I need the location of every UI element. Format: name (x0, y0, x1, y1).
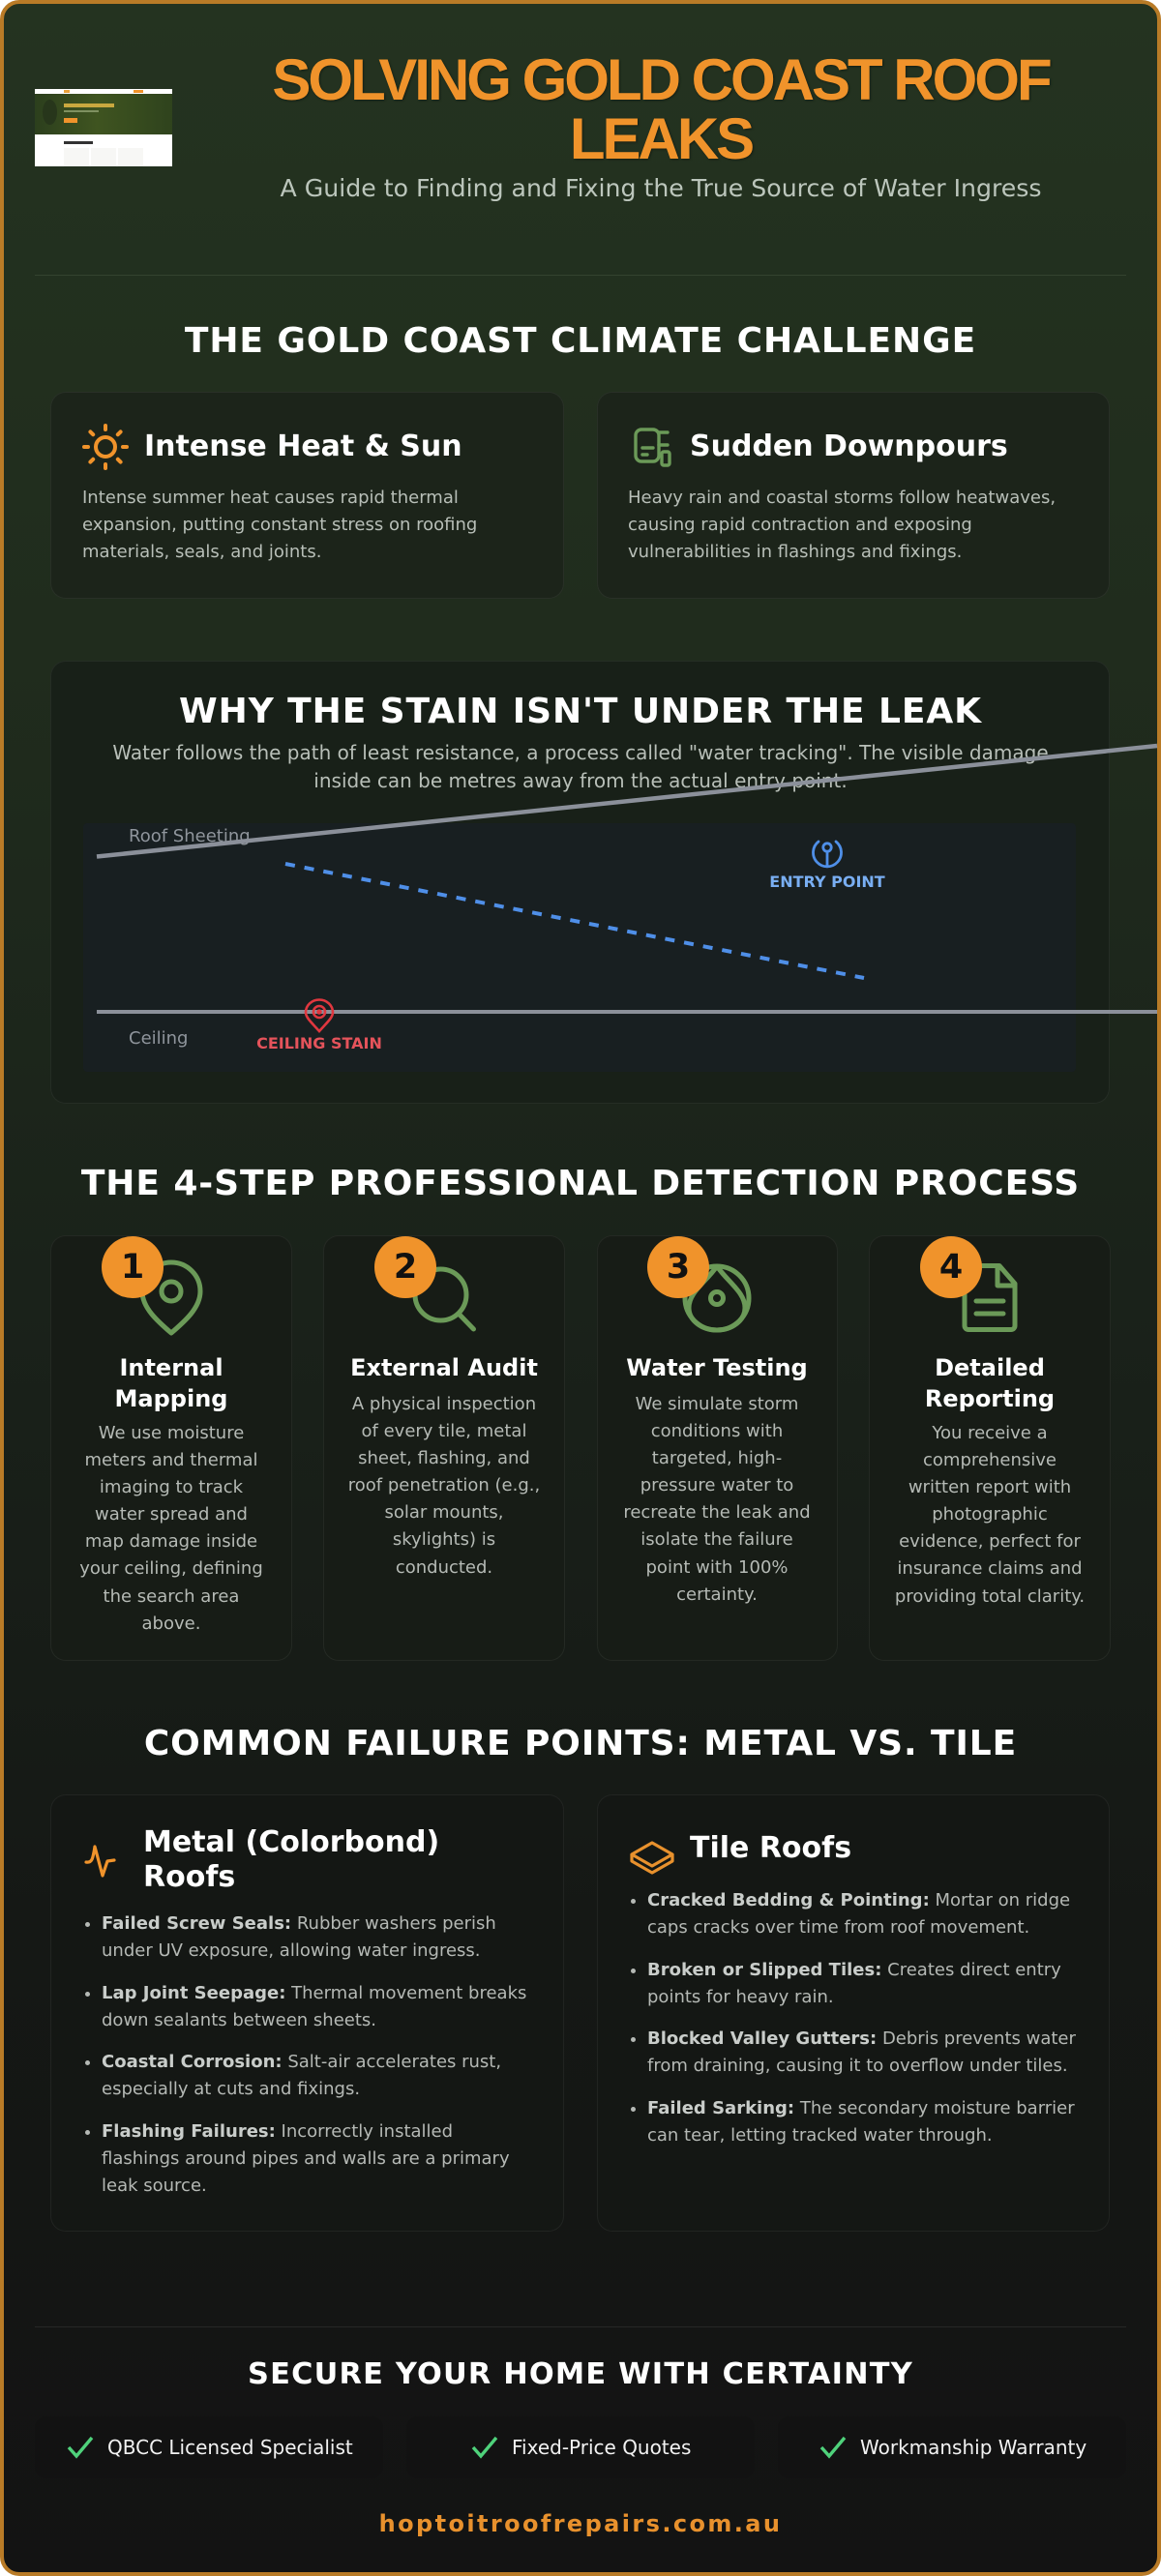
item: Flashing Failures: Incorrectly installed (102, 2121, 453, 2142)
panel: sudden downpours (597, 392, 1110, 599)
title: SOLVING GOLD COAST ROOF (272, 47, 1050, 112)
item: points for heavy rain. (647, 1987, 834, 2007)
item: flashings around pipes and walls are a primary (102, 2148, 510, 2169)
item (647, 2095, 1075, 2149)
step description: providing total clarity. (895, 1586, 1085, 1607)
badge: 3: 3 (667, 1248, 690, 1287)
item: Cracked Bedding & Pointing: Mortar on ridge (647, 1890, 1070, 1910)
step description: conditions with (651, 1421, 783, 1441)
panel: step 1 (50, 1235, 292, 1661)
item: Lap Joint Seepage: Thermal movement breaks (102, 1983, 526, 2003)
heading: metal roofs: Metal (Colorbond) (143, 1825, 439, 1859)
step title: Detailed (935, 1354, 1045, 1381)
item: Blocked Valley Gutters: Debris prevents water (647, 2028, 1076, 2049)
diagram background (83, 823, 1076, 1072)
panel: water tracking (50, 661, 1110, 1104)
step description: comprehensive (923, 1450, 1057, 1470)
badge: 2 (374, 1236, 436, 1298)
text: water tracking: inside can be metres away from the actual entry point. (313, 769, 848, 792)
step description: We simulate storm (636, 1394, 798, 1414)
icon: check (820, 2436, 846, 2459)
step title: Internal (119, 1354, 223, 1381)
text: intense heat: expansion, putting constant stress on roofing (82, 515, 477, 535)
heading: sudden downpours: Sudden Downpours (690, 429, 1008, 463)
text: intense heat: Intense summer heat causes rapid thermal (82, 488, 459, 508)
step description (895, 1423, 1085, 1607)
panel: metal roofs (50, 1794, 564, 2232)
icon: check (472, 2436, 497, 2459)
section heading: detection process: THE 4-STEP PROFESSIONAL DETECTION PROCESS (81, 1164, 1080, 1203)
item: Failed Screw Seals: Rubber washers perish (102, 1913, 496, 1934)
title (272, 47, 1051, 171)
icon: rain (634, 428, 671, 467)
item (647, 2026, 1076, 2080)
step description: above. (142, 1614, 200, 1634)
label: roof sheeting: Roof Sheeting (129, 826, 251, 846)
step description: You receive a (932, 1423, 1048, 1443)
heading: metal roofs (143, 1825, 439, 1894)
text: water tracking: Water follows the path of least resistance, a process called "water tracking". The visible damage (112, 741, 1049, 764)
step description: evidence, perfect for (899, 1531, 1081, 1552)
logo thumbnail (35, 89, 172, 166)
step description: imaging to track (100, 1477, 243, 1497)
badge: 1 (102, 1236, 164, 1298)
label: ceiling stain: CEILING STAIN (256, 1034, 382, 1052)
text: sudden downpours (628, 488, 1056, 562)
heading: tile roofs: Tile Roofs (690, 1831, 851, 1865)
trust badge: warranty (778, 2416, 1126, 2478)
step description: point with 100% (646, 1557, 788, 1578)
step title: Mapping (115, 1385, 227, 1412)
badge: 1: 1 (121, 1248, 144, 1287)
step description: certainty. (676, 1584, 758, 1605)
step description: insurance claims and (897, 1558, 1083, 1579)
text: water tracking (112, 741, 1049, 792)
step description: isolate the failure (640, 1529, 793, 1550)
text: intense heat: materials, seals, and joints. (82, 542, 321, 562)
heading: metal roofs: Roofs (143, 1860, 235, 1894)
step description (623, 1394, 811, 1605)
step description: meters and thermal (84, 1450, 257, 1470)
text: sudden downpours: Heavy rain and coastal storms follow heatwaves, (628, 488, 1056, 508)
label: ceiling: Ceiling (129, 1028, 188, 1049)
section heading: failure points: COMMON FAILURE POINTS: METAL VS. TILE (144, 1724, 1017, 1763)
trust badge: licensed (35, 2416, 383, 2478)
website url: hoptoitroofrepairs.com.au (379, 2510, 782, 2537)
trust badge: quotes (406, 2416, 755, 2478)
item: leak source. (102, 2176, 207, 2196)
step description: recreate the leak and (623, 1502, 811, 1523)
icon: ceiling stain (304, 998, 335, 1033)
step description: sheet, flashing, and (358, 1448, 530, 1468)
label: entry point: ENTRY POINT (769, 873, 885, 891)
step description: conducted. (396, 1557, 492, 1578)
step description: of every tile, metal (362, 1421, 526, 1441)
item (102, 1910, 496, 1965)
icon: check (68, 2436, 93, 2459)
text: QBCC Licensed Specialist (107, 2436, 353, 2459)
step description: roof penetration (e.g., (348, 1475, 540, 1495)
heading: water tracking: WHY THE STAIN ISN'T UNDER THE LEAK (179, 692, 982, 731)
step title: External Audit (350, 1354, 538, 1381)
badge: 4 (920, 1236, 982, 1298)
icon: metal wave (84, 1845, 116, 1878)
step description (348, 1394, 540, 1578)
subtitle: A Guide to Finding and Fixing the True Source of Water Ingress (281, 174, 1041, 202)
step description: map damage inside (85, 1531, 257, 1552)
heading: call to action: SECURE YOUR HOME WITH CERTAINTY (248, 2357, 913, 2391)
text: intense heat (82, 488, 477, 562)
item (647, 1957, 1061, 2011)
step description: targeted, high- (652, 1448, 782, 1468)
icon: tile layers (630, 1841, 674, 1875)
step description (79, 1423, 263, 1634)
icon: entry point (812, 840, 843, 869)
step title: Water Testing (626, 1354, 808, 1381)
step title (115, 1354, 227, 1412)
heading: intense heat: Intense Heat & Sun (144, 429, 462, 463)
item: Coastal Corrosion: Salt-air accelerates rust, (102, 2052, 501, 2072)
title: LEAKS (570, 106, 752, 171)
icon: magnifier (412, 1267, 476, 1331)
step description: skylights) is (393, 1529, 495, 1550)
text: sudden downpours: causing rapid contraction and exposing (628, 515, 972, 535)
item: from draining, causing it to overflow under tiles. (647, 2056, 1068, 2076)
text: Workmanship Warranty (860, 2436, 1087, 2459)
step title (925, 1354, 1055, 1412)
panel: tile roofs (597, 1794, 1110, 2232)
item: Failed Sarking: The secondary moisture barrier (647, 2098, 1075, 2118)
step description: water spread and (95, 1504, 248, 1525)
step description: solar mounts, (384, 1502, 504, 1523)
item (102, 2118, 510, 2201)
step title: Reporting (925, 1385, 1055, 1412)
text: sudden downpours: vulnerabilities in flashings and fixings. (628, 542, 962, 562)
panel: step 3 (597, 1235, 838, 1661)
item: Broken or Slipped Tiles: Creates direct entry (647, 1960, 1061, 1980)
step description: written report with (908, 1477, 1071, 1497)
icon: map pin (140, 1259, 203, 1336)
step description: pressure water to (640, 1475, 793, 1495)
item (102, 1980, 526, 2034)
section heading: climate challenge: THE GOLD COAST CLIMATE CHALLENGE (185, 321, 976, 361)
item: caps cracks over time from roof movement. (647, 1917, 1029, 1938)
badge: 4: 4 (939, 1248, 963, 1287)
step description: A physical inspection (352, 1394, 536, 1414)
icon: sun (82, 424, 129, 470)
badge: 3 (647, 1236, 709, 1298)
step description: the search area (104, 1586, 239, 1607)
text: Fixed-Price Quotes (512, 2436, 691, 2459)
item: down sealants between sheets. (102, 2010, 376, 2030)
step description: We use moisture (99, 1423, 244, 1443)
step description: your ceiling, defining (79, 1558, 263, 1579)
item: under UV exposure, allowing water ingress. (102, 1940, 481, 1961)
icon: document (962, 1263, 1018, 1332)
panel: intense heat and sun (50, 392, 564, 599)
item: can tear, letting tracked water through. (647, 2125, 993, 2146)
icon: water drop (683, 1263, 751, 1333)
panel: step 2 (323, 1235, 565, 1661)
item: especially at cuts and fixings. (102, 2079, 360, 2099)
badge: 2: 2 (394, 1248, 417, 1287)
item (647, 1887, 1070, 1941)
step description: photographic (932, 1504, 1048, 1525)
item (102, 2049, 501, 2103)
panel: step 4 (869, 1235, 1111, 1661)
